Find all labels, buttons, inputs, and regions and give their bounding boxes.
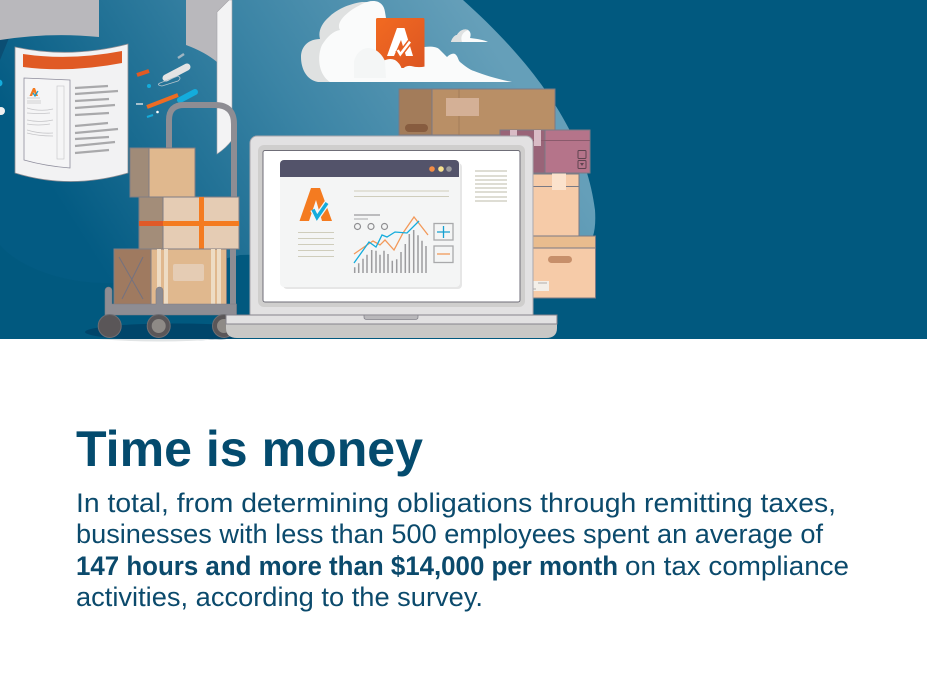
dark wedge behind sheet	[0, 38, 9, 60]
floating gray sheet left	[0, 0, 99, 40]
illustration banner	[0, 0, 927, 340]
strapped box	[139, 197, 239, 249]
large brown box	[399, 89, 555, 135]
text lines	[298, 191, 449, 256]
body paragraph: activities, according to the survey.	[76, 582, 483, 612]
flying office supplies	[136, 54, 195, 117]
cloud puffs over tile	[380, 59, 425, 82]
cloud with logo	[301, 1, 512, 82]
dashboard logo	[300, 188, 332, 221]
body paragraph	[76, 488, 849, 612]
logo tile	[376, 18, 424, 68]
heading: Time is money	[76, 421, 423, 477]
option circles	[354, 224, 388, 230]
bottom box	[114, 249, 226, 305]
hand truck frame	[169, 105, 234, 306]
floating gray sheet right	[186, 0, 229, 62]
cart shadow	[85, 324, 265, 340]
pink box	[500, 130, 590, 173]
body paragraph: In total, from determining obligations through remitting taxes,	[76, 488, 836, 518]
cart base and wheels	[98, 287, 236, 338]
body paragraph: businesses with less than 500 employees spent an average of	[76, 519, 824, 549]
laptop	[226, 136, 557, 338]
ground shadow under banner	[97, 339, 222, 342]
dashboard window	[280, 160, 462, 289]
body paragraph: 147 hours and more than $14,000 per month	[76, 551, 618, 581]
peach box	[533, 173, 579, 236]
bottom carton	[533, 236, 596, 298]
body paragraph: on tax compliance	[625, 551, 849, 581]
white paper strip	[217, 0, 232, 154]
cart boxes	[114, 148, 239, 305]
laptop lid	[250, 136, 533, 321]
cloud front	[319, 1, 512, 82]
minus button	[434, 246, 453, 262]
plus button	[434, 224, 453, 240]
small cloud	[451, 29, 488, 42]
stacked boxes behind laptop	[399, 89, 596, 298]
banner background	[0, 0, 927, 339]
side text lines	[475, 171, 507, 201]
cloud lower puff	[354, 48, 386, 78]
cloud back	[301, 2, 385, 82]
document page	[15, 44, 128, 182]
laptop screen	[263, 150, 520, 302]
dots at left edge	[0, 80, 5, 115]
laptop base	[226, 315, 557, 338]
background blob	[0, 0, 595, 283]
top box	[130, 148, 195, 197]
bar and line chart	[354, 217, 428, 273]
